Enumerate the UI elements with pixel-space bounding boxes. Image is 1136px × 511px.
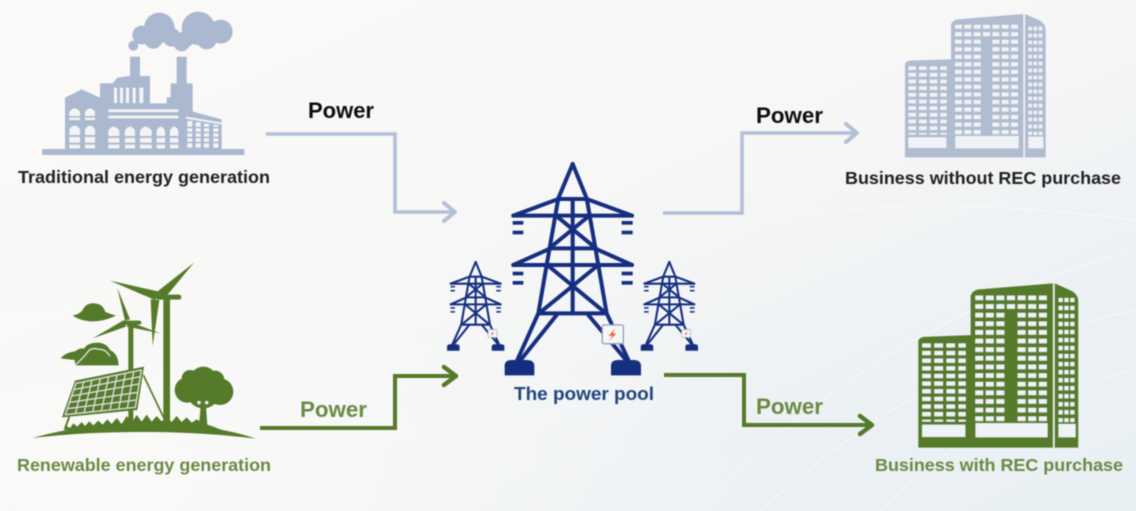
arrow: pool to business without REC: [663, 124, 857, 213]
label: power, top right: Power: [756, 103, 823, 128]
icon: green office buildings: [918, 283, 1078, 448]
label: business with REC purchase: Business with REC purchase: [875, 455, 1123, 475]
panel: traditional energy generation: [18, 12, 270, 187]
label: renewable energy generation: Renewable energy generation: [17, 455, 271, 475]
label: power, bottom left: Power: [300, 397, 367, 422]
label: the power pool: The power pool: [514, 384, 654, 404]
icon: gray office buildings: [905, 14, 1046, 157]
panel: renewable energy generation: [17, 263, 271, 475]
icon: wind turbines, solar panel and tree: [33, 263, 256, 439]
label: power, top left: Power: [308, 98, 374, 123]
panel: the power pool: [447, 164, 698, 404]
panel: business with REC purchase: [875, 283, 1123, 475]
label: traditional energy generation: Traditional energy generation: [18, 167, 270, 187]
icon: small tower right: [641, 262, 698, 351]
icon: small tower left: [447, 262, 504, 351]
arrow: renewable power into the pool: [260, 367, 456, 428]
label: business without REC purchase: Business without REC purchase: [845, 168, 1121, 188]
arrow: traditional power into the pool: [266, 134, 455, 221]
icon: factory: [42, 12, 244, 155]
arrow: pool to business with REC: [664, 375, 872, 434]
icon: main transmission tower: [505, 164, 641, 375]
panel: business without REC purchase: [845, 14, 1121, 188]
label: power, bottom right: Power: [756, 394, 823, 419]
